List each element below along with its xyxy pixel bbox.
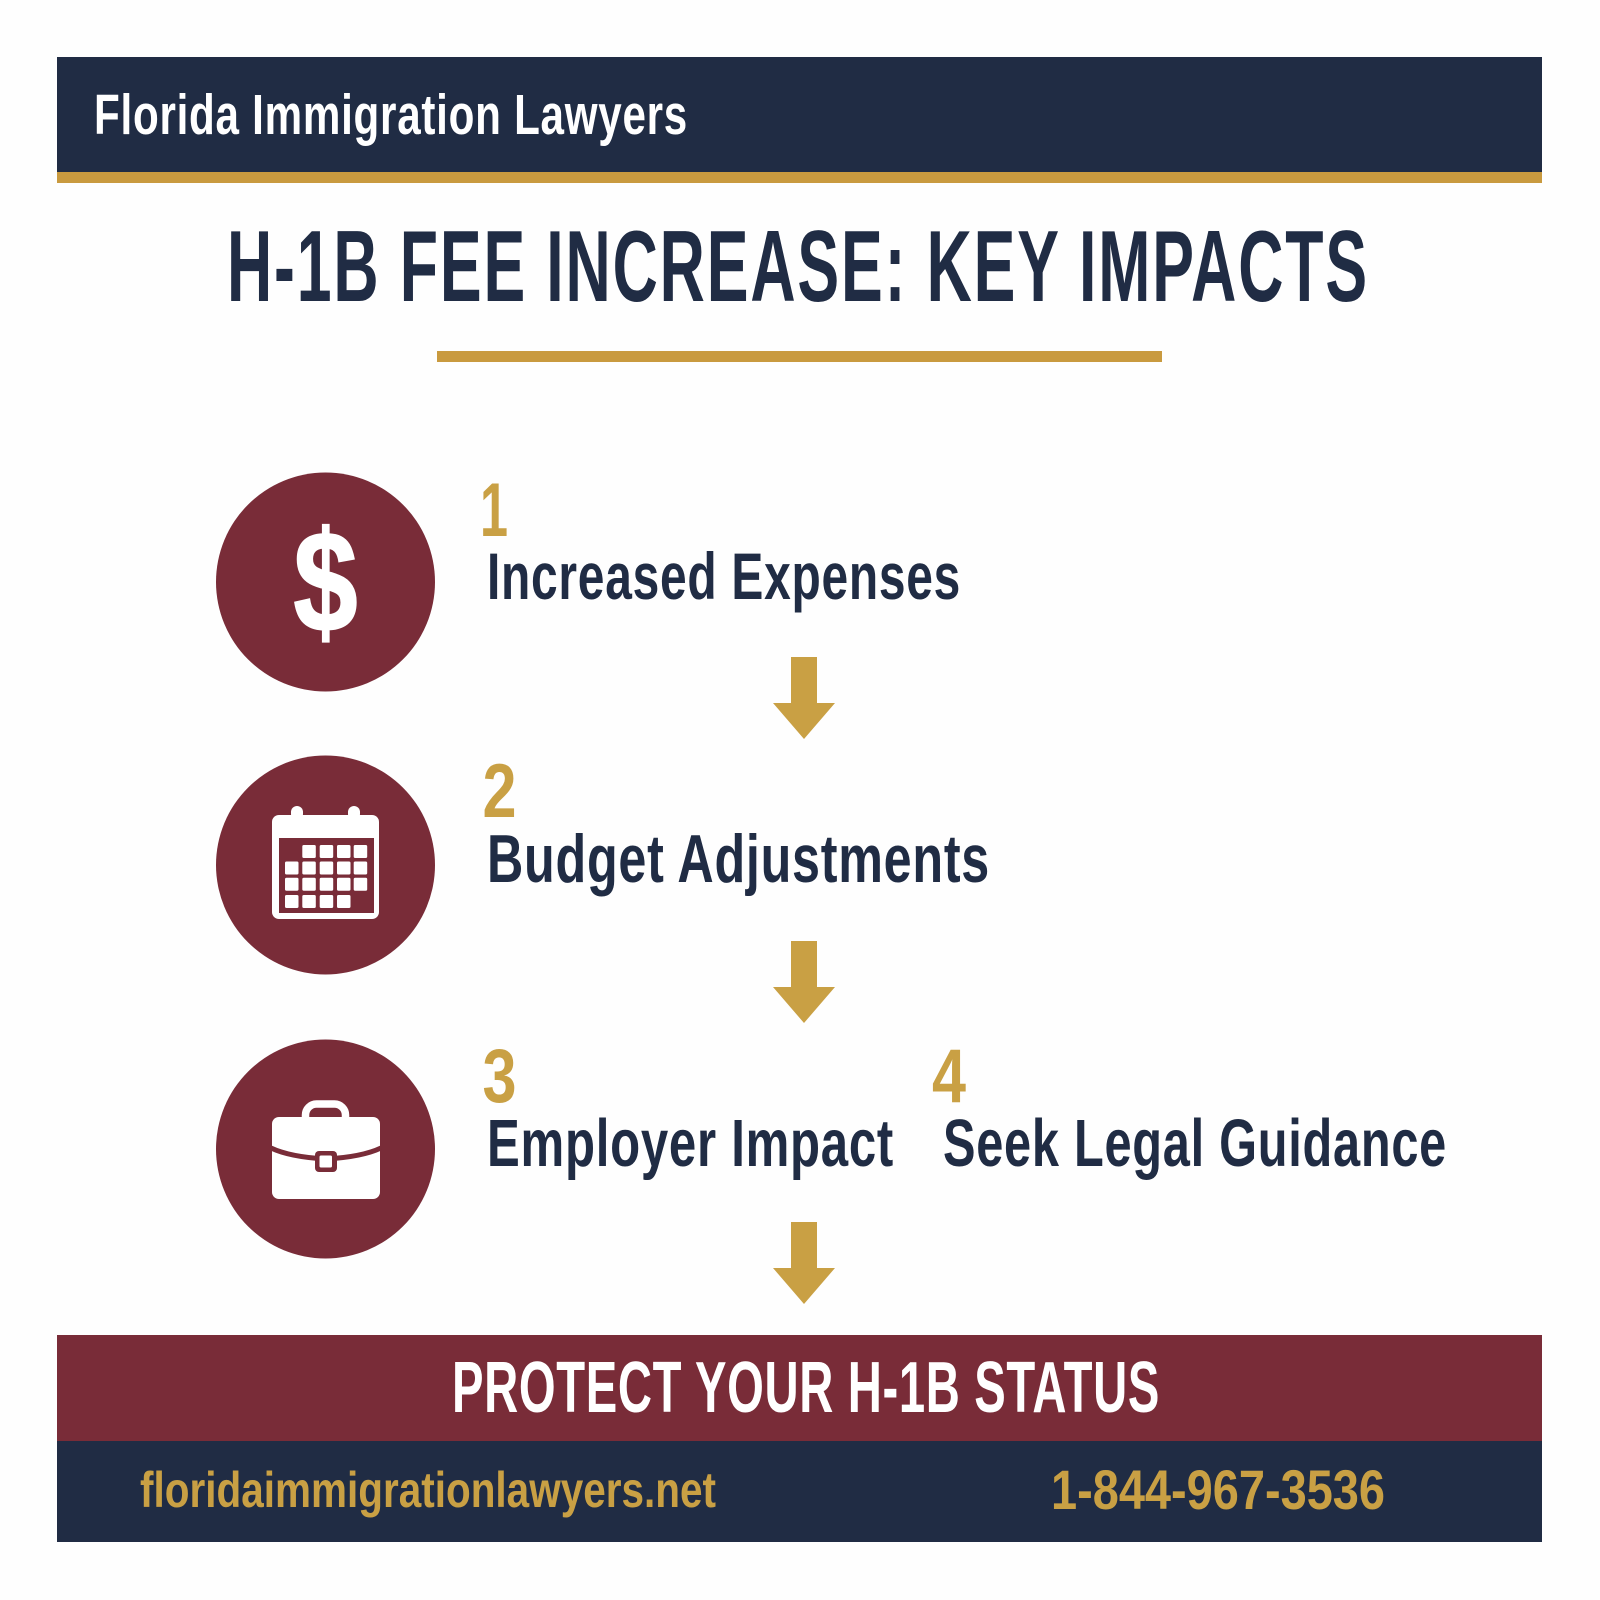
label: increased expenses: Increased Expenses	[487, 539, 961, 613]
header banner	[57, 57, 1542, 183]
call to action banner: PROTECT YOUR H-1B STATUS	[452, 1348, 1160, 1428]
phone number: 1-844-967-3536	[1051, 1458, 1385, 1521]
title underline	[437, 351, 1162, 362]
number 1: 1	[480, 468, 508, 553]
website: floridaimmigrationlawyers.net	[140, 1462, 716, 1518]
header banner: Florida Immigration Lawyers	[94, 83, 688, 147]
step 4: seek legal guidance	[932, 1034, 1447, 1181]
arrow 3	[773, 1222, 835, 1304]
number 4: 4	[932, 1034, 966, 1119]
contact footer	[57, 1441, 1542, 1542]
icon: dollar sign	[216, 472, 435, 692]
number 2: 2	[482, 749, 516, 834]
icon: calendar	[216, 756, 435, 974]
number 3: 3	[482, 1034, 516, 1119]
icon: briefcase	[216, 1040, 435, 1258]
label: budget adjustments: Budget Adjustments	[487, 821, 990, 897]
label: employer impact: Employer Impact	[487, 1106, 894, 1181]
step 2: budget adjustments	[216, 749, 990, 974]
step 3: employer impact	[216, 1034, 894, 1258]
arrow 2	[773, 941, 835, 1023]
step 1: increased expenses	[216, 468, 961, 692]
call to action banner	[57, 1335, 1542, 1441]
arrow 1	[773, 657, 835, 739]
icon: dollar sign: $	[294, 503, 358, 662]
